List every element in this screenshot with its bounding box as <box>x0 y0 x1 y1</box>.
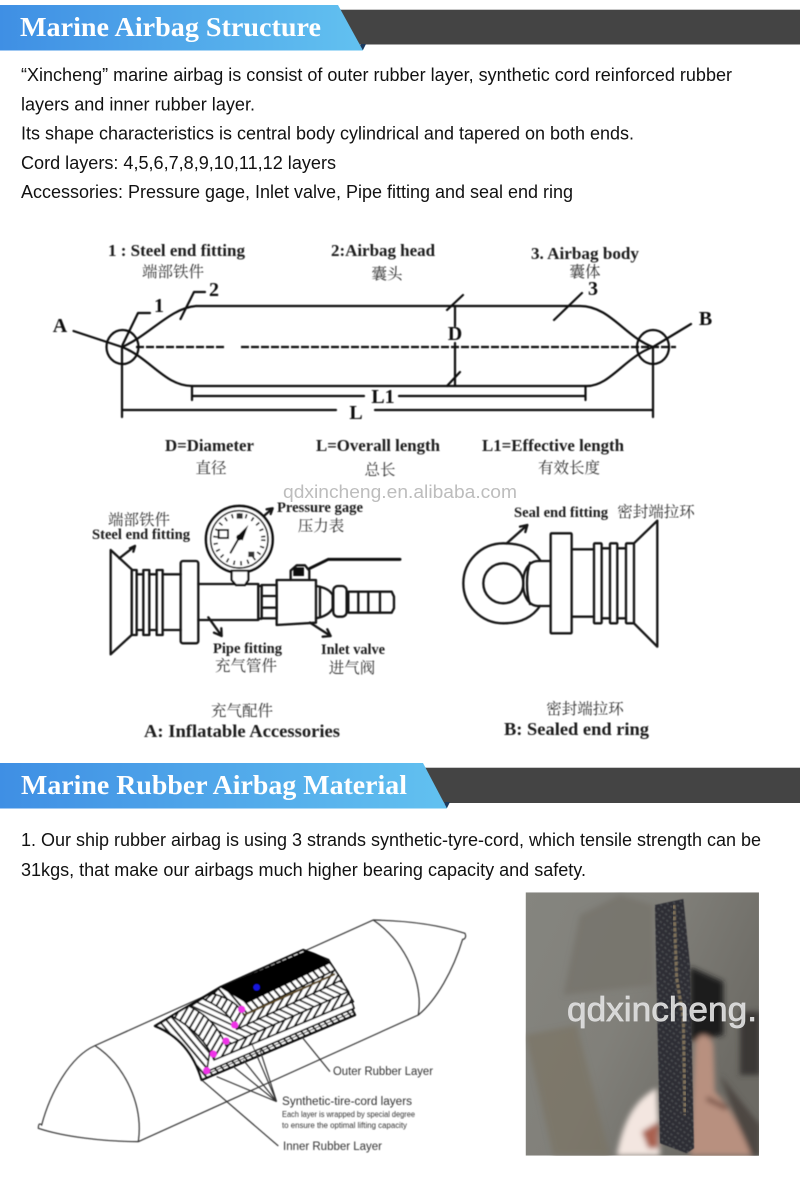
labels for drawing B: Seal end fitting <box>514 505 609 521</box>
leader lines <box>202 1037 330 1146</box>
labels for drawing A: 压力表 <box>298 516 344 535</box>
diagram labels: L=Overall length <box>316 436 441 455</box>
airbag dimension diagram <box>53 278 712 424</box>
photo: airbag rubber cross-section <box>526 892 760 1156</box>
heading text: Marine Airbag Structure <box>20 12 321 42</box>
intro text block: Cord layers: 4,5,6,7,8,9,10,11,12 layers <box>21 153 336 173</box>
watermark: qdxincheng.en.alibaba.com <box>283 481 517 502</box>
diagram labels: 端部铁件 <box>142 263 204 281</box>
labels for drawing A: 充气配件 <box>211 702 273 720</box>
diagram labels: 3. Airbag body <box>531 244 639 263</box>
airbag dimension diagram: 2 <box>209 279 219 301</box>
labels for drawing A: 充气管件 <box>215 657 277 675</box>
header: Marine Airbag Structure <box>0 5 800 50</box>
labels for drawing B: 密封端拉环 <box>617 503 695 521</box>
drawing A: inflatable accessories <box>111 506 400 654</box>
airbag dimension diagram: D <box>448 323 462 345</box>
labels for drawing A: A: Inflatable Accessories <box>144 721 340 741</box>
cutaway labels: to ensure the optimal lifting capacity <box>282 1121 407 1130</box>
labels for drawing A: Pipe fitting <box>213 641 283 657</box>
labels for drawing B <box>504 503 695 739</box>
marker dots <box>203 984 260 1074</box>
airbag dimension diagram: L <box>349 402 363 424</box>
drawing B: sealed end ring <box>463 521 657 647</box>
diagram labels: 2:Airbag head <box>331 241 436 260</box>
material text block: 1. Our ship rubber airbag is using 3 strands synthetic-tyre-cord, which tensile strength can be <box>21 830 761 850</box>
cutaway labels: Outer Rubber Layer <box>333 1066 433 1078</box>
cutaway labels: Synthetic-tire-cord layers <box>282 1096 412 1108</box>
airbag layer cutaway illustration <box>38 920 466 1146</box>
diagram labels: D=Diameter <box>165 436 254 455</box>
diagram labels: 总长 <box>364 461 396 479</box>
intro text block: Accessories: Pressure gage, Inlet valve, Pipe fitting and seal end ring <box>21 182 573 202</box>
intro text block: “Xincheng” marine airbag is consist of outer rubber layer, synthetic cord reinforced rubber <box>21 65 732 85</box>
material text block <box>21 830 761 880</box>
labels for drawing A: 端部铁件 <box>108 511 170 529</box>
diagram labels: L1=Effective length <box>482 436 625 455</box>
intro text block: Its shape characteristics is central body cylindrical and tapered on both ends. <box>21 124 634 144</box>
cutaway labels: Each layer is wrapped by special degree <box>282 1110 416 1119</box>
airbag dimension diagram: 3 <box>588 278 598 300</box>
diagram labels: 囊头 <box>371 265 403 283</box>
labels for drawing A: Pressure gage <box>277 500 364 516</box>
intro text block <box>21 65 732 202</box>
airbag dimension diagram: B <box>699 308 712 330</box>
labels for drawing A: Steel end fitting <box>92 527 191 543</box>
labels for drawing A: 进气阀 <box>329 659 375 677</box>
diagram labels: 有效长度 <box>538 459 600 477</box>
photo watermark: qdxincheng. <box>567 991 757 1029</box>
diagram labels <box>108 241 639 479</box>
cutaway labels: Inner Rubber Layer <box>283 1141 382 1153</box>
header: Marine Rubber Airbag Material <box>0 763 800 808</box>
heading text: Marine Rubber Airbag Material <box>21 770 408 800</box>
airbag dimension diagram: 1 <box>154 295 164 317</box>
airbag dimension diagram: L1 <box>371 386 395 408</box>
labels for drawing B: B: Sealed end ring <box>504 719 649 739</box>
labels for drawing A <box>92 500 386 741</box>
material text block: 31kgs, that make our airbags much higher bearing capacity and safety. <box>21 860 586 880</box>
airbag outline <box>38 920 466 1142</box>
cutaway labels <box>282 1066 433 1153</box>
hatched cord layers <box>155 950 355 1080</box>
diagram labels: 囊体 <box>569 263 601 281</box>
outer black rubber layer <box>220 951 330 1003</box>
airbag dimension diagram: A <box>53 315 68 337</box>
labels for drawing B: 密封端拉环 <box>546 700 624 718</box>
diagram labels: 直径 <box>195 459 227 477</box>
labels for drawing A: Inlet valve <box>321 642 386 658</box>
intro text block: layers and inner rubber layer. <box>21 94 255 114</box>
diagram labels: 1 : Steel end fitting <box>108 241 245 260</box>
